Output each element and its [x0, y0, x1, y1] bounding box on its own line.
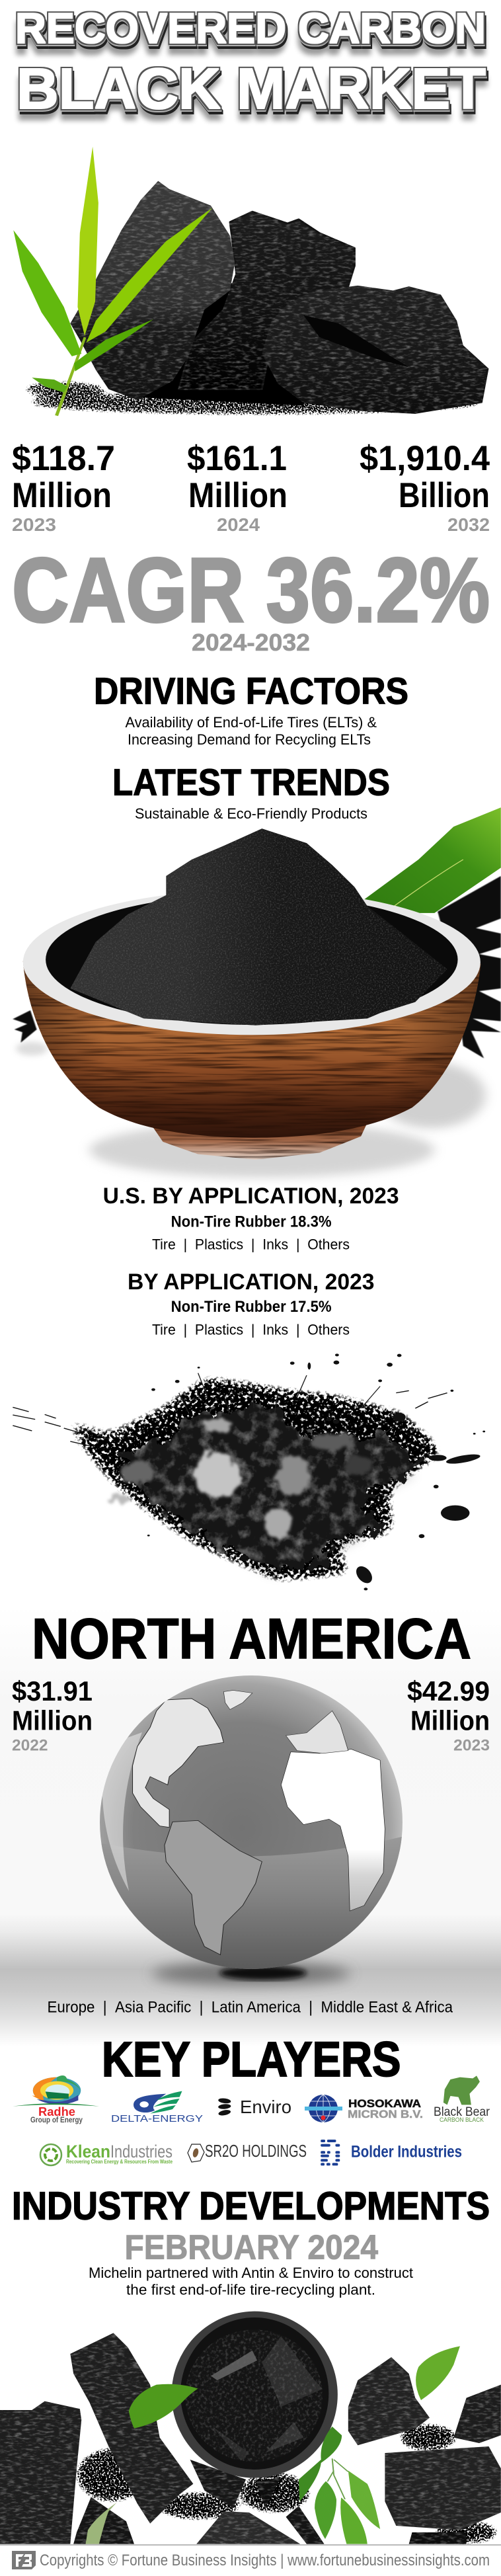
- logo: Black Bear Carbon Black: Black Bear: [434, 2105, 490, 2119]
- CAGR figure: 2024-2032: [192, 629, 310, 656]
- stat: North America 2022: Million: [12, 1705, 93, 1736]
- stat: North America 2023: $42.99: [407, 1675, 490, 1707]
- section: latest trends: LATEST TRENDS: [112, 762, 390, 804]
- stat: 2024 market size: Million: [188, 476, 288, 515]
- section: U.S. by application: U.S. BY APPLICATION, 2023: [103, 1184, 399, 1209]
- title: BLACK MARKET: [17, 57, 486, 121]
- logo: Delta-Energy: DELTA-ENERGY: [111, 2113, 203, 2124]
- logo: SR2O Holdings: [188, 2141, 307, 2162]
- logo: Enviro: Enviro: [240, 2097, 291, 2117]
- stat: 2032 market size: $1,910.4: [360, 439, 490, 478]
- stat: North America 2023: 2023: [453, 1737, 490, 1755]
- logo: Hosokawa Micron: MICRON B.V.: [348, 2108, 423, 2120]
- stat: 2023 market size: $118.7: [12, 439, 115, 478]
- section: global by application: Tire | Plastics | Inks | Others: [152, 1321, 350, 1338]
- section: industry developments: Michelin partnered with Antin & Enviro to construct: [89, 2265, 413, 2281]
- stat: 2032 market size: 2032: [447, 514, 490, 535]
- stat: North America 2022: $31.91: [12, 1675, 93, 1707]
- section: industry developments: the first end-of-life tire-recycling plant.: [126, 2282, 375, 2298]
- image: silver globe: [93, 1675, 410, 1986]
- logo: Radhe Group of Energy: [13, 2075, 99, 2124]
- logo: SR2O Holdings: SR2O HOLDINGS: [205, 2141, 307, 2161]
- logo: Enviro: [217, 2097, 291, 2117]
- stat: 2024 market size: $161.1: [187, 439, 287, 478]
- stat: 2032 market size: [360, 439, 490, 535]
- section: driving factors: [94, 670, 408, 748]
- logo: Klean Industries: Recovering Clean Energy & Resources From Waste: [66, 2159, 173, 2165]
- logo: Bolder Industries: [321, 2140, 462, 2165]
- background: globe floor shading: [0, 1914, 501, 2046]
- logo: Hosokawa Micron: HOSOKAWA: [348, 2097, 421, 2110]
- title: [15, 4, 486, 121]
- logo: Klean Industries: [40, 2142, 173, 2165]
- stat: North America 2022: 2022: [12, 1737, 48, 1755]
- image: carbon powder explosion: [13, 1353, 485, 1590]
- section: global by application: BY APPLICATION, 2023: [128, 1269, 374, 1295]
- logo: Radhe Group of Energy: Radhe: [38, 2105, 75, 2118]
- section: latest trends: Sustainable & Eco-Friendly Products: [135, 805, 367, 822]
- stat: 2024 market size: [187, 439, 288, 535]
- logo: Klean Industries: Klean: [66, 2142, 110, 2161]
- section: U.S. by application: Non-Tire Rubber 18.3%: [171, 1213, 332, 1230]
- logo: Klean Industries: Industries: [110, 2142, 173, 2161]
- logo: Radhe Group of Energy: Group of Energy: [30, 2115, 83, 2124]
- stat: 2023 market size: Million: [12, 476, 112, 515]
- footer: [12, 2551, 490, 2569]
- image: wooden bowl of carbon powder: [13, 807, 501, 1178]
- section: U.S. by application: [103, 1184, 399, 1252]
- map: Greenland and Arctic: [223, 1690, 252, 1709]
- map: Europe: [286, 1711, 348, 1753]
- section: global by application: [128, 1269, 374, 1338]
- stat: 2024 market size: 2024: [217, 514, 260, 535]
- section: U.S. by application: Tire | Plastics | Inks | Others: [152, 1236, 350, 1252]
- logo: Bolder Industries: Bolder Industries: [351, 2143, 462, 2161]
- image: charcoal, bowl and green leaves: [0, 2312, 501, 2544]
- other regions list: Europe | Asia Pacific | Latin America | Middle East & Africa: [48, 1998, 453, 2017]
- footer rule: [0, 2544, 501, 2546]
- stat: North America 2023: [407, 1675, 490, 1755]
- icon: Fortune Business Insights logo: [12, 2551, 36, 2569]
- image: charcoal lumps and bamboo leaves: [13, 147, 488, 416]
- stat: North America 2023: Million: [410, 1705, 490, 1736]
- logo: Black Bear Carbon Black: [434, 2075, 490, 2123]
- stat: 2023 market size: 2023: [12, 514, 56, 535]
- section: latest trends: [112, 762, 390, 822]
- logo: Black Bear Carbon Black: CARBON BLACK: [440, 2116, 484, 2123]
- stat: North America 2022: [12, 1675, 93, 1755]
- title: RECOVERED CARBON: [15, 4, 486, 52]
- heading: key players: KEY PLAYERS: [102, 2032, 401, 2087]
- section: driving factors: DRIVING FACTORS: [94, 670, 408, 713]
- stat: 2023 market size: [12, 439, 115, 535]
- map: South America: [165, 1820, 262, 1954]
- section: driving factors: Increasing Demand for Recycling ELTs: [128, 731, 371, 748]
- background: globe backdrop wash: [0, 1607, 501, 1914]
- section: industry developments: [12, 2185, 490, 2298]
- logo: Delta-Energy: [111, 2091, 203, 2124]
- map: Africa: [281, 1750, 385, 1911]
- section: driving factors: Availability of End-of-Life Tires (ELTs) &: [126, 714, 377, 731]
- map: North America: [133, 1699, 223, 1828]
- section: industry developments: FEBRUARY 2024: [124, 2229, 378, 2267]
- section: global by application: Non-Tire Rubber 17.5%: [171, 1298, 332, 1316]
- region heading: North America: NORTH AMERICA: [32, 1607, 471, 1671]
- logo: Hosokawa Micron: [305, 2095, 423, 2122]
